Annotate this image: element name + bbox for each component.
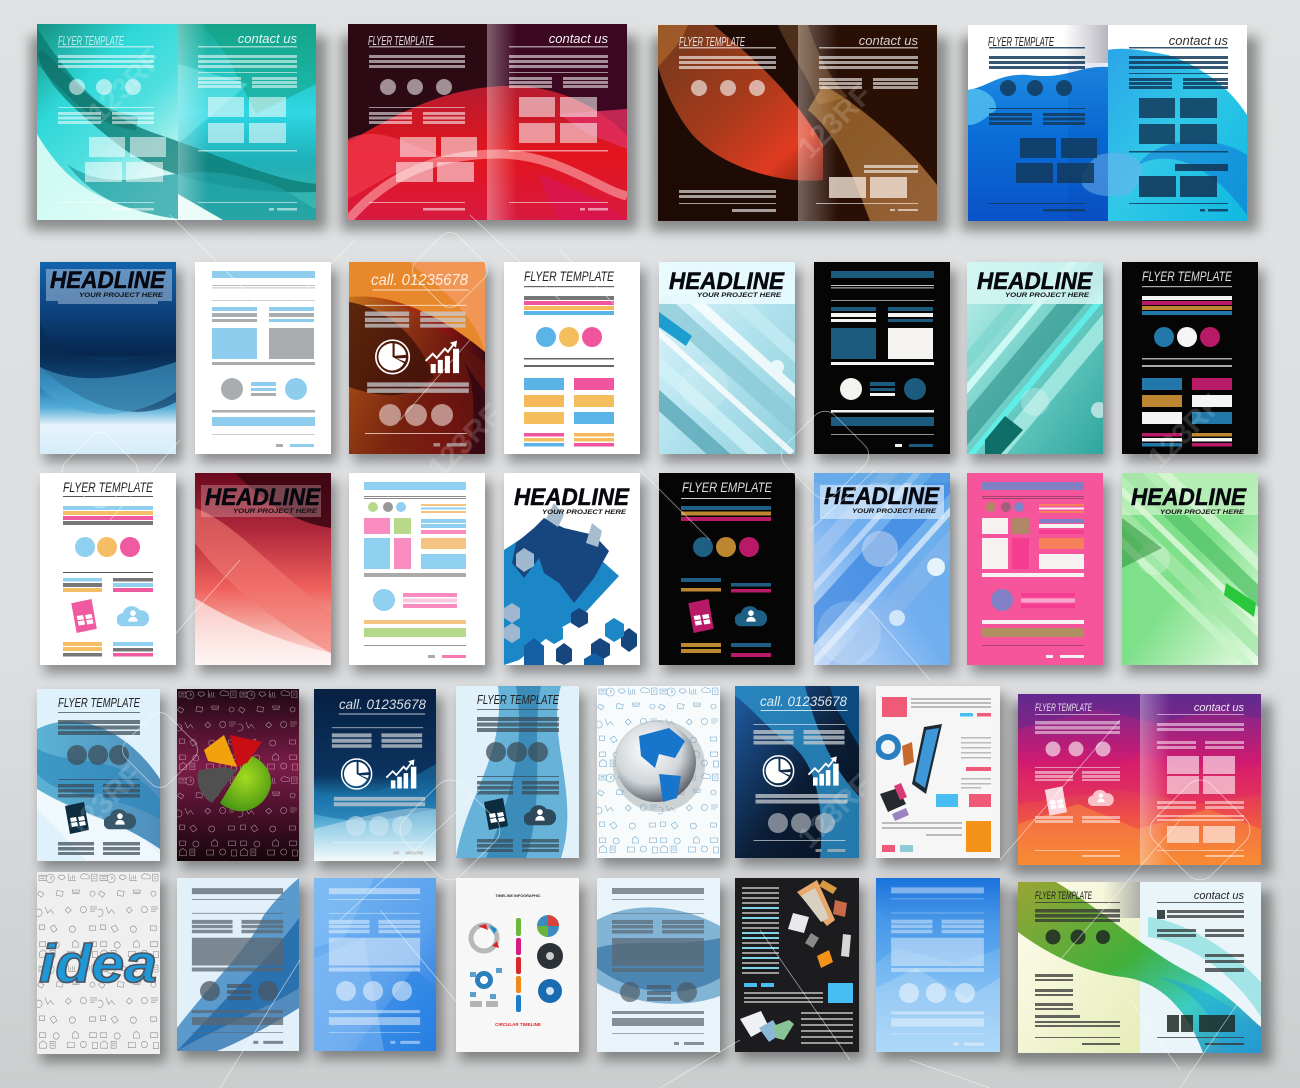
poster: flyer template vertical blue wave (456, 686, 585, 866)
circles (379, 404, 453, 426)
artwork: diagonal stripes and circles (747, 427, 1003, 694)
poster: call number orange (349, 262, 491, 462)
artwork: red gradient and waves (195, 473, 331, 665)
lower boxes (1139, 164, 1228, 197)
poster: timeline infographic (456, 878, 585, 1060)
watermark text: 123RF (792, 78, 879, 165)
artwork: dark brown with orange swirl (658, 25, 937, 221)
colour blocks (882, 697, 991, 852)
text bars, circles and boxes (369, 46, 608, 210)
artwork: diagonal wave (177, 878, 299, 1051)
headline panel (201, 485, 321, 517)
layout bars (329, 888, 420, 1044)
poster: pink grid layout (967, 473, 1109, 673)
footer title: CIRCULAR TIMELINE (495, 1022, 541, 1027)
spread: green and teal wave brochure (1011, 882, 1272, 1063)
headline: HEADLINE (669, 268, 785, 295)
small infographic charts (470, 915, 563, 1007)
poster: headline crimson wave (195, 473, 337, 673)
text bars and circles (989, 47, 1228, 212)
artwork: orange to dark red gradient (349, 262, 485, 454)
grey text lines (882, 698, 991, 836)
layout bars (612, 888, 704, 1045)
circles (200, 981, 278, 1001)
colour blocks (744, 983, 853, 1003)
poster: flyer template light blue wave (37, 689, 166, 869)
layout bars, pie and chart (365, 289, 469, 446)
poster: headline on navy wave (40, 262, 182, 462)
circles (620, 982, 697, 1002)
artwork: dark maroon with red dome (348, 24, 627, 220)
artwork: white with blue paint (968, 25, 1247, 221)
watermark text: 123RF (422, 398, 509, 485)
call number: call. 01235678 (371, 272, 468, 289)
heading: FLYER EMPLATE (682, 479, 773, 495)
artwork: teal background and wave (37, 24, 316, 220)
poster: black layout navy white (814, 262, 956, 462)
headline: HEADLINE (514, 484, 630, 511)
artwork: diagonal stripes (910, 221, 1150, 482)
poster: headline hexagon blue (504, 473, 646, 673)
layout bars, pie and chart (754, 710, 848, 852)
circles and boxes (1046, 910, 1235, 1032)
poster: white layout blue grey (195, 262, 337, 462)
icon: sheet (71, 599, 97, 633)
circles (768, 813, 835, 833)
headline: HEADLINE (205, 484, 321, 511)
contact label: contact us (1194, 702, 1244, 714)
icon: sheet (484, 798, 508, 830)
layout bars (58, 712, 140, 855)
icon: sheet (688, 599, 714, 633)
watermark stamps and lines (58, 215, 1257, 1088)
contact label: contact us (238, 31, 297, 46)
circles and boxes (1046, 742, 1235, 843)
poster: idea doodle sketch (35, 872, 166, 1062)
poster: white tablet workspace (875, 686, 1005, 866)
artwork: hexagon mosaic (504, 503, 637, 665)
contact label: contact us (859, 33, 918, 48)
watermark text: 123RF (792, 768, 879, 855)
artwork: vertical wave (456, 686, 579, 858)
call number: call. 01235678 (339, 696, 426, 712)
artwork: light blue wave (37, 689, 160, 861)
poster: headline green stripes (1076, 440, 1300, 684)
artwork: gradient polygons (1018, 694, 1261, 865)
heading: FLYER TEMPLATE (1035, 702, 1092, 714)
poster: call number navy wave (314, 689, 443, 869)
poster: black flyer template with icons (659, 473, 801, 673)
pale boxes (829, 177, 907, 198)
artwork: diagonal stripes (590, 244, 863, 509)
heading: FLYER TEMPLATE (1035, 890, 1092, 902)
headline panel (46, 269, 172, 304)
teal lines (742, 907, 779, 969)
poster: white flyer template pink orange blue (504, 262, 646, 462)
contact label: contact us (1194, 890, 1244, 902)
icon: sheet (65, 802, 89, 834)
title: TIMELINE INFOGRAPHIC (495, 894, 541, 898)
layout bars (477, 709, 559, 852)
spread: purple to orange polygon brochure (1011, 694, 1272, 875)
icon: cloud (117, 606, 149, 626)
heading: FLYER TEMPLATE (988, 34, 1054, 49)
headline: HEADLINE (977, 268, 1093, 295)
tagline: YOUR PROJECT HERE (233, 508, 318, 515)
artwork: navy with blue waves (314, 689, 436, 861)
globe (613, 720, 705, 812)
poster: headline blue stripes (747, 427, 1003, 694)
poster: call number black blue wave (735, 686, 864, 866)
spread: teal wave brochure (30, 24, 327, 230)
text bars, circles and boxes (58, 46, 297, 210)
text bars (1035, 714, 1244, 857)
headline: HEADLINE (50, 267, 166, 294)
tagline: YOUR PROJECT HERE (79, 292, 164, 299)
artwork: diagonal stripes (1076, 440, 1300, 684)
3d pie chart (198, 735, 271, 811)
text lines (742, 887, 853, 1044)
heading: FLYER TEMPLATE (58, 33, 124, 48)
poster: headline cyan stripes (590, 244, 863, 509)
artwork: blue polygons (314, 878, 436, 1051)
doodles (35, 874, 158, 1049)
watermark text: 123RF (1142, 388, 1229, 475)
spread: crimson wave brochure (341, 24, 638, 230)
poster: white flyer template with icons (40, 473, 182, 673)
poster: doodles with globe (595, 686, 726, 866)
doodles (595, 688, 718, 853)
tagline: YOUR PROJECT HERE (1005, 292, 1090, 299)
watermark text: 123RF (62, 758, 149, 845)
artwork: horizontal wave (597, 878, 720, 1052)
contact label: contact us (1169, 33, 1228, 48)
artwork: bright blue polygons (876, 878, 1000, 1052)
headline: HEADLINE (1131, 484, 1247, 511)
call number: call. 01235678 (760, 693, 847, 709)
poster: white pastel grid layout (349, 473, 491, 673)
icon: cloud (104, 809, 136, 829)
icon: sheet (1045, 786, 1067, 816)
heading: FLYER TEMPLATE (368, 33, 434, 48)
poster: black desk workspace (735, 878, 864, 1060)
layout bars, pie and chart (332, 714, 425, 854)
artwork: dark with blue vertical wave (735, 686, 859, 858)
poster: headline teal stripes (910, 221, 1150, 482)
heading: FLYER TEMPLATE (679, 34, 745, 49)
tagline: YOUR PROJECT HERE (852, 508, 937, 515)
idea word: idea (39, 934, 157, 994)
layout bars (192, 888, 283, 1044)
tagline: YOUR PROJECT HERE (542, 509, 627, 516)
circles (346, 816, 412, 836)
watermark text (62, 43, 1229, 855)
poster: black flyer template blue magenta (1122, 262, 1264, 462)
bars and circles (63, 496, 153, 656)
icon: cloud (735, 606, 767, 626)
poster: pale blue horizontal wave (597, 878, 726, 1060)
poster: pale blue diagonal wave (177, 878, 306, 1059)
doodles (175, 690, 298, 856)
poster: maroon doodles with 3d pie (175, 689, 306, 869)
contact label: contact us (549, 31, 608, 46)
poster: blue polygons (314, 878, 443, 1059)
spread: orange swirl brochure (651, 25, 948, 231)
circles (336, 981, 412, 1001)
dark text bars (1035, 902, 1244, 1045)
icon: cloud (1088, 790, 1114, 806)
poster: bright blue polygons (876, 878, 1005, 1060)
desk items (740, 880, 851, 1042)
headline: HEADLINE (824, 483, 940, 510)
layout bars (891, 887, 984, 1046)
tablet and desk items (875, 724, 942, 821)
icon: cloud (524, 805, 556, 825)
vertical timeline (516, 918, 521, 1012)
spread: blue paint brochure (961, 25, 1258, 231)
circles (899, 983, 975, 1003)
bars and circles (681, 498, 771, 657)
tagline: YOUR PROJECT HERE (697, 292, 782, 299)
tagline: YOUR PROJECT HERE (1160, 509, 1245, 516)
artwork: pale paper with green wave (1018, 882, 1261, 1053)
text bars and circles (679, 47, 918, 212)
artwork: navy gradient and blue waves (40, 262, 176, 454)
watermark text: 123RF (82, 43, 169, 130)
